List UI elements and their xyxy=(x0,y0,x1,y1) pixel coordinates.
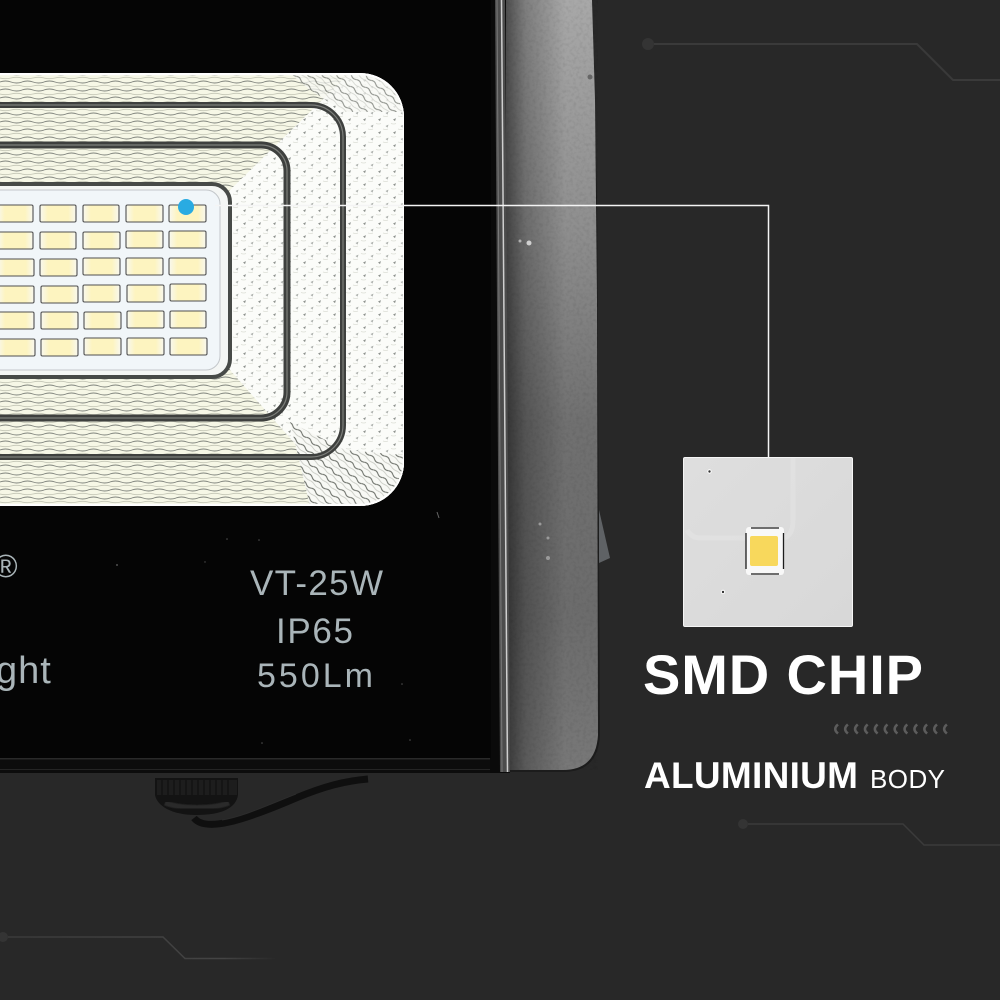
reflector lens xyxy=(0,73,404,506)
LED chip xyxy=(746,527,784,575)
lens base xyxy=(0,73,404,506)
model number: VT-25W xyxy=(250,564,383,603)
floodlight product photo xyxy=(0,0,610,824)
printed label text on panel xyxy=(0,548,383,695)
circuit traces xyxy=(687,458,793,538)
circuit line: lower right xyxy=(738,819,1000,845)
cable xyxy=(194,779,368,824)
front frame xyxy=(0,0,510,773)
reflector ring 2 xyxy=(0,145,287,418)
black glass panel xyxy=(0,0,491,758)
callout leader line xyxy=(215,206,768,457)
heading: SMD CHIP: SMD CHIP xyxy=(643,643,923,706)
callout marker: blue dot xyxy=(178,199,194,215)
lens side facets xyxy=(230,73,404,506)
outer lens edge xyxy=(0,74,404,505)
rear mounting notch xyxy=(599,510,610,563)
subheading: ALUMINIUM BODY: BODY xyxy=(870,764,945,794)
circuit line: top right xyxy=(642,38,1000,80)
subheading: ALUMINIUM BODY: ALUMINIUM xyxy=(644,755,858,796)
lens corner facets xyxy=(290,73,404,506)
reflector ring 1 xyxy=(0,105,343,457)
protection rating: IP65 xyxy=(276,612,353,651)
SMD chip close-up xyxy=(684,458,852,626)
LED board xyxy=(0,184,230,377)
solder holes xyxy=(708,470,725,594)
LED rows xyxy=(0,205,207,356)
cable gland xyxy=(155,778,238,815)
lumen output: 550Lm xyxy=(257,657,373,695)
circuit line: bottom left xyxy=(0,932,277,958)
aluminium body xyxy=(505,0,600,772)
chevron divider xyxy=(835,724,947,734)
